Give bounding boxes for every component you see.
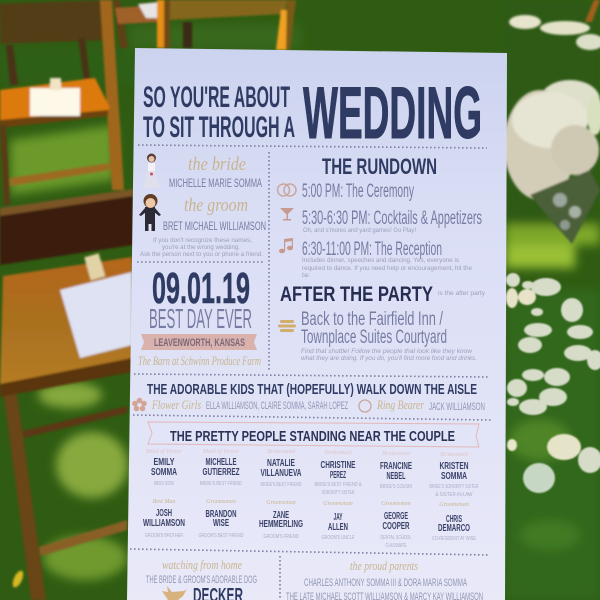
groomsmen row: Groomsman <box>206 499 236 505</box>
venue: The Barn at Schwinn Produce Farm <box>138 353 261 368</box>
bridesmaids row: NATALIE <box>267 458 295 469</box>
groomsmen row: GROOM'S UNCLE <box>322 535 355 541</box>
title: SO YOU'RE ABOUT <box>143 81 290 114</box>
groomsmen row: GROOM'S FRIEND <box>264 534 299 540</box>
groomsmen row: JAY <box>334 512 343 523</box>
bridesmaids row: Maid of Honor <box>145 448 183 455</box>
groomsmen row: ALLEN <box>328 522 348 533</box>
bridesmaids row: Bridesmaid <box>382 451 411 457</box>
bridesmaids row: BRIDE'S BEST FRIEND <box>260 482 302 488</box>
bridesmaids row: KRISTEN <box>440 461 468 472</box>
heading: the groom: the groom <box>184 195 248 216</box>
bridesmaids row: MICHELLE <box>206 457 237 468</box>
icon: dog <box>162 586 187 600</box>
schedule: ceremony: 5:00 PM: The Ceremony <box>302 181 414 202</box>
note: reception: required to dance. If you need help or encouragement, hit the <box>302 265 472 272</box>
note: shuttle: what they are doing. If you do, you'll find more food and drinks. <box>301 355 477 362</box>
groomsmen row: ZANE <box>273 510 289 521</box>
bridesmaids row: BRIDE'S BEST FRIEND & <box>314 482 362 488</box>
bridesmaids row: BRIDE'S BEST FRIEND <box>200 481 242 487</box>
icon: groom <box>139 194 161 231</box>
bridesmaids row: SOMMA <box>151 467 177 478</box>
icon: food <box>278 320 296 332</box>
paper sign <box>127 48 507 600</box>
groomsmen row: DENTAL SCHOOL <box>380 535 412 541</box>
groomsmen row: HEMMERLING <box>259 519 303 530</box>
parents: bride: CHARLES ANTHONY SOMMA III & DORA MARIA SOMMA <box>304 577 467 589</box>
venue: hotel: Back to the Fairfield Inn / <box>301 309 443 330</box>
panel: after the party <box>278 283 486 362</box>
icon: bride <box>143 154 160 188</box>
icon: rings <box>278 184 296 196</box>
bridesmaids row: Maid of Honor <box>202 448 240 455</box>
ribbon heading <box>148 422 479 447</box>
groomsmen row: Best Man <box>153 499 175 505</box>
groomsmen row: Groomsman <box>381 501 411 507</box>
heading: the rundown: THE RUNDOWN <box>322 154 437 179</box>
caption: dog: THE BRIDE & GROOM'S ADORABLE DOG <box>146 574 257 586</box>
bridesmaids row: BRIDE'S SORORITY SISTER <box>430 484 479 490</box>
bridesmaids row: & SISTER-IN-LAW <box>436 492 473 498</box>
bridesmaids row: BRIDE'S SISTER <box>154 481 174 487</box>
venue: hotel: Townplace Suites Courtyard <box>301 327 447 348</box>
aside: is the after party <box>438 290 486 297</box>
note: reception: bar. <box>302 272 310 279</box>
bridesmaids row <box>145 448 479 498</box>
photo: wooden folding chairs on the left <box>0 0 296 600</box>
note: reception: Includes dinner, speeches and dancing. Yes, everyone is <box>302 257 460 264</box>
role: flower girls: Flower Girls <box>151 397 201 412</box>
groomsmen row: GROOM'S BROTHER <box>145 533 183 539</box>
panel: the rundown <box>278 154 482 279</box>
panel: wedding party <box>143 422 479 549</box>
panel: kids <box>132 381 485 413</box>
icon: ring <box>359 400 371 412</box>
bridesmaids row: FRANCINE <box>380 461 412 472</box>
name: bride: MICHELLE MARIE SOMMA <box>169 176 262 190</box>
photo: white flowers and scattered petals on the right <box>504 0 600 493</box>
groomsmen row: BRANDON <box>206 509 236 520</box>
bridesmaids row: Bridesmaid <box>324 450 353 456</box>
groomsmen row: WISE <box>213 518 229 529</box>
ribbon heading: THE PRETTY PEOPLE STANDING NEAR THE COUPLE <box>170 429 455 445</box>
note: names: you're at the wrong wedding. <box>162 244 240 251</box>
groomsmen row: CHRIS <box>446 514 462 525</box>
title <box>143 73 482 154</box>
bridesmaids row: VILLANUEVA <box>260 468 302 479</box>
heading: the proud parents: the proud parents <box>350 558 418 573</box>
panel: date and place <box>138 264 261 368</box>
icon: music note <box>279 238 293 253</box>
bridesmaids row: Bridesmaid <box>440 452 469 458</box>
title: TO SIT THROUGH A <box>143 111 295 144</box>
note: names <box>140 237 263 258</box>
bridesmaids row: Bridesmaid <box>267 449 296 455</box>
bridesmaids row: SOMMA <box>441 471 467 482</box>
icon: cocktail <box>280 208 294 220</box>
groomsmen row: CO-RESIDENT AT WISE <box>432 536 476 542</box>
groomsmen row: Groomsman <box>439 502 469 508</box>
groomsmen row: Groomsman <box>323 501 353 507</box>
panel: watching from home <box>146 557 257 600</box>
names: flower girls: ELLA WILLIAMSON, CLAIRE SOMMA, SARAH LOPEZ <box>206 400 348 412</box>
bridesmaids row: CHRISTINE <box>320 460 356 471</box>
date: 09.01.19 <box>152 264 250 313</box>
schedule: reception: 6:30-11:00 PM: The Reception <box>302 239 442 260</box>
heading: the bride: the bride <box>188 154 246 175</box>
groomsmen row <box>143 499 476 549</box>
note: reception <box>302 257 472 279</box>
bridesmaids row: EMILY <box>154 457 175 468</box>
names: ring bearer: JACK WILLIAMSON <box>429 401 485 413</box>
venue: hotel <box>301 309 447 348</box>
role: ring bearer: Ring Bearer <box>376 397 425 412</box>
panel: couple <box>139 154 266 258</box>
bridesmaids row: NEBEL <box>386 471 406 482</box>
groomsmen row: WILLIAMSON <box>143 518 185 529</box>
bridesmaids row: PEREZ <box>330 470 346 481</box>
note: shuttle: Find that shuttle! Follow the people that look like they know <box>301 348 473 355</box>
groomsmen row: JOSH <box>156 508 172 519</box>
bridesmaids row: SORORITY SISTER <box>322 490 355 496</box>
groomsmen row: DEMARCO <box>438 523 470 534</box>
name: groom: BRET MICHAEL WILLIAMSON <box>163 219 266 233</box>
bridesmaids row: BRIDE'S COUSIN <box>380 484 412 490</box>
note: cocktails: Oh, and s'mores and yard games! Go Play! <box>303 227 416 234</box>
note: names: Ask the person next to you or phone a friend. <box>140 251 263 258</box>
groomsmen row: Groomsman <box>266 500 296 506</box>
heading: after the party: AFTER THE PARTY <box>280 283 433 306</box>
dotted dividers <box>130 145 491 600</box>
bridesmaids row: GUTIERREZ <box>202 467 240 478</box>
heading: watching from home: watching from home <box>162 557 242 572</box>
panel: date and place: BEST DAY EVER <box>149 303 252 334</box>
groomsmen row: CLASSMATE <box>386 543 407 549</box>
location ribbon: LEAVENWORTH, KANSAS <box>154 337 245 349</box>
note: shuttle <box>301 348 477 362</box>
icon: flower <box>132 398 147 411</box>
note: names: If you don't recognize these names, <box>153 237 252 244</box>
groomsmen row: COOPER <box>382 521 410 532</box>
groomsmen row: GEORGE <box>384 511 408 522</box>
groomsmen row: GROOM'S BEST FRIEND <box>198 533 244 539</box>
panel: the proud parents <box>286 558 483 600</box>
